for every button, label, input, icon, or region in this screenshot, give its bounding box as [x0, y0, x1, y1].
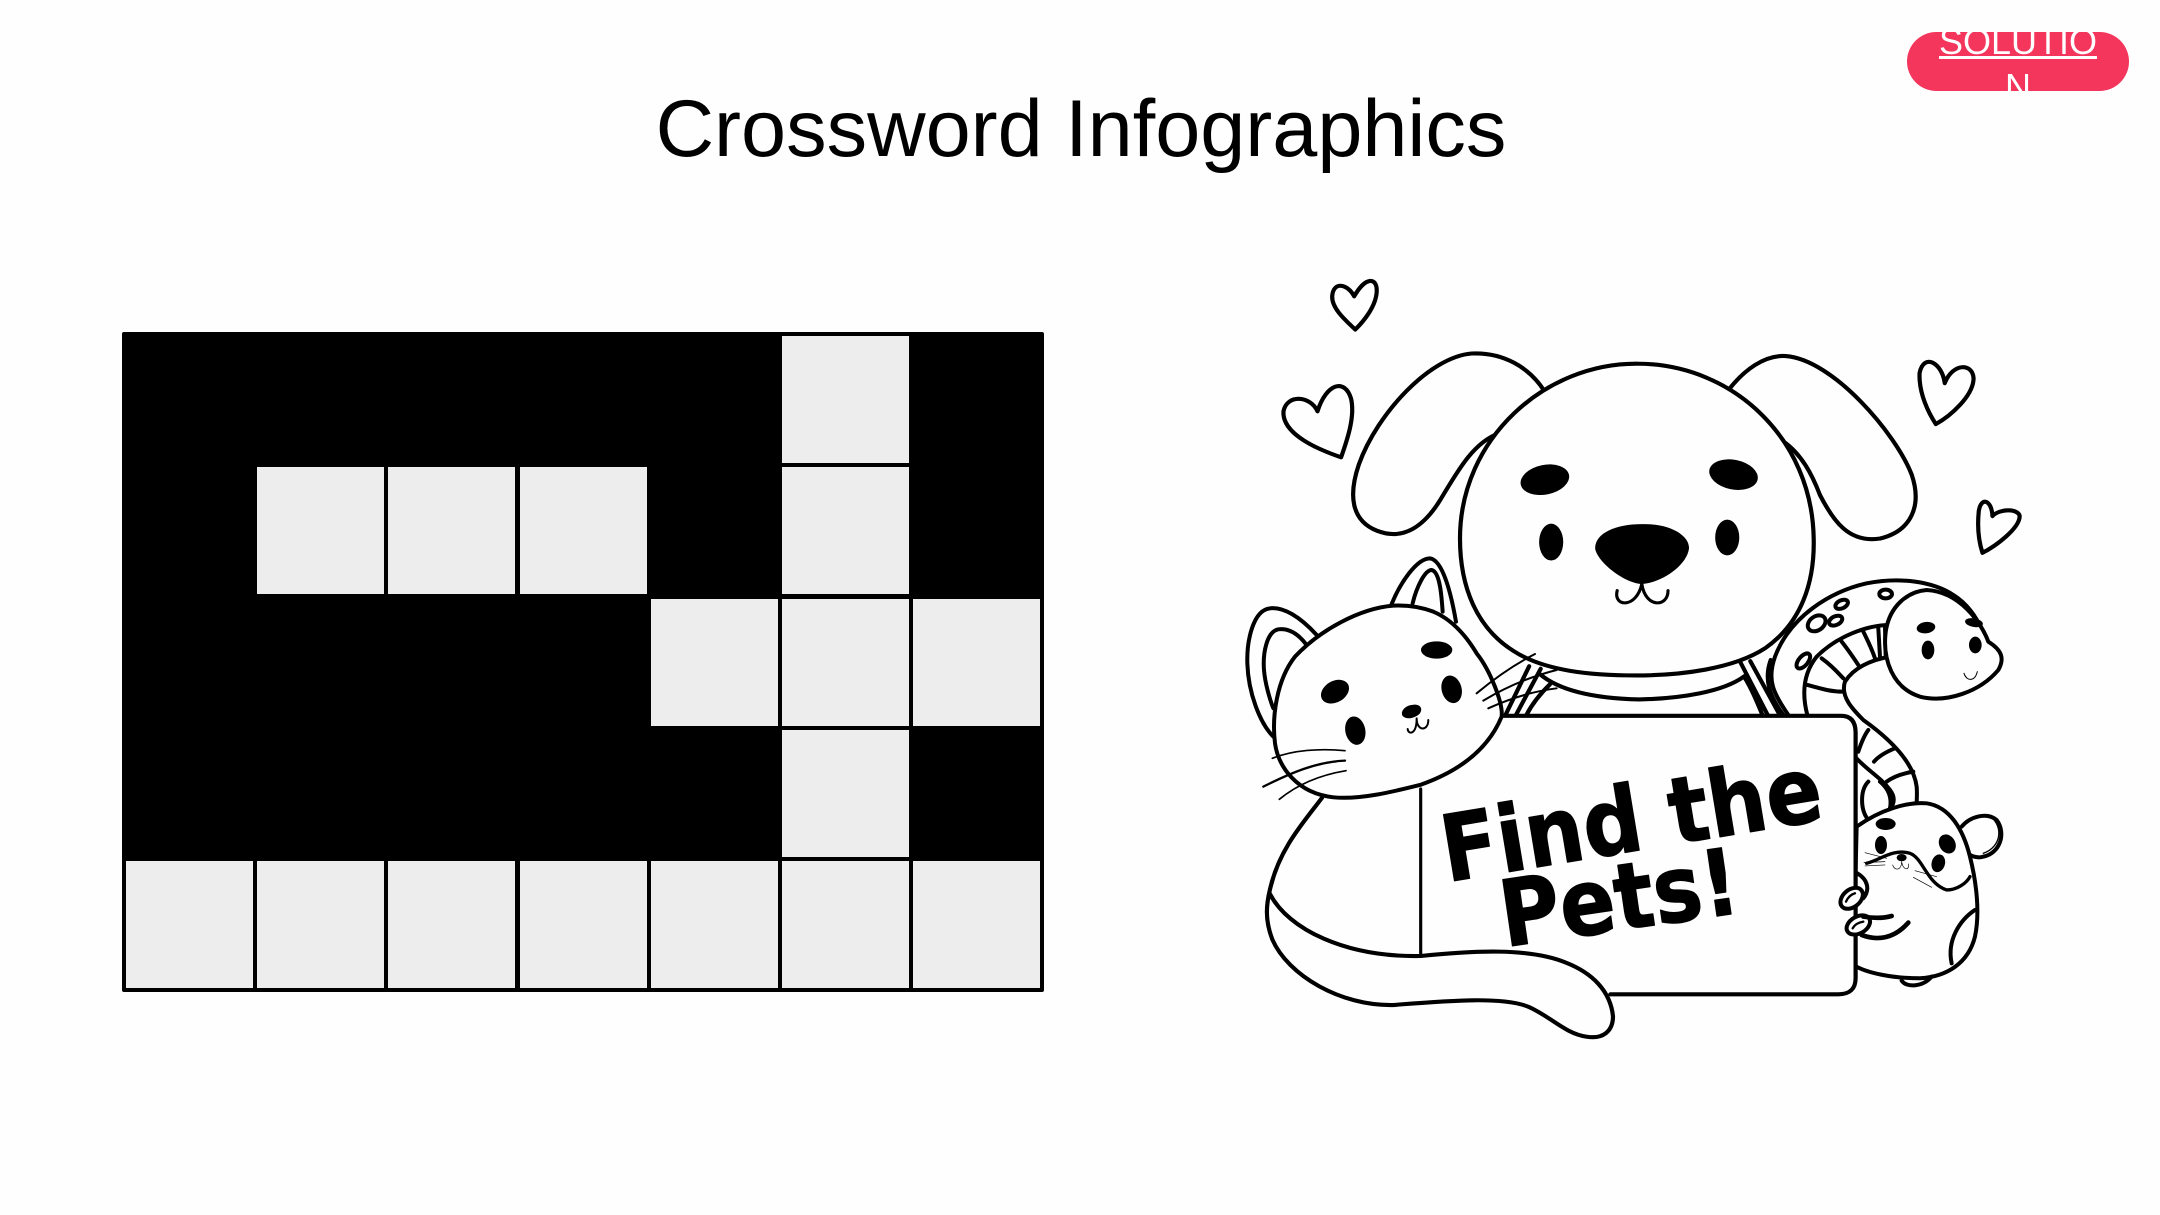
sign text line 2: Pets!: [1493, 828, 1746, 969]
title: Crossword Infographics: [656, 84, 1506, 174]
sign board: [1421, 716, 1856, 994]
hamster hands: [1836, 873, 1908, 939]
cat: [1247, 558, 1613, 1037]
sign text line 1: Find the: [1433, 735, 1829, 904]
crossword grid: [122, 332, 1044, 992]
cat head: [1247, 558, 1557, 799]
cat body and tail: [1267, 798, 1613, 1037]
snake: [1768, 580, 2002, 820]
hamster body: [1853, 803, 2001, 985]
dog: [1353, 353, 1916, 715]
icon: hearts: [1283, 281, 2020, 553]
